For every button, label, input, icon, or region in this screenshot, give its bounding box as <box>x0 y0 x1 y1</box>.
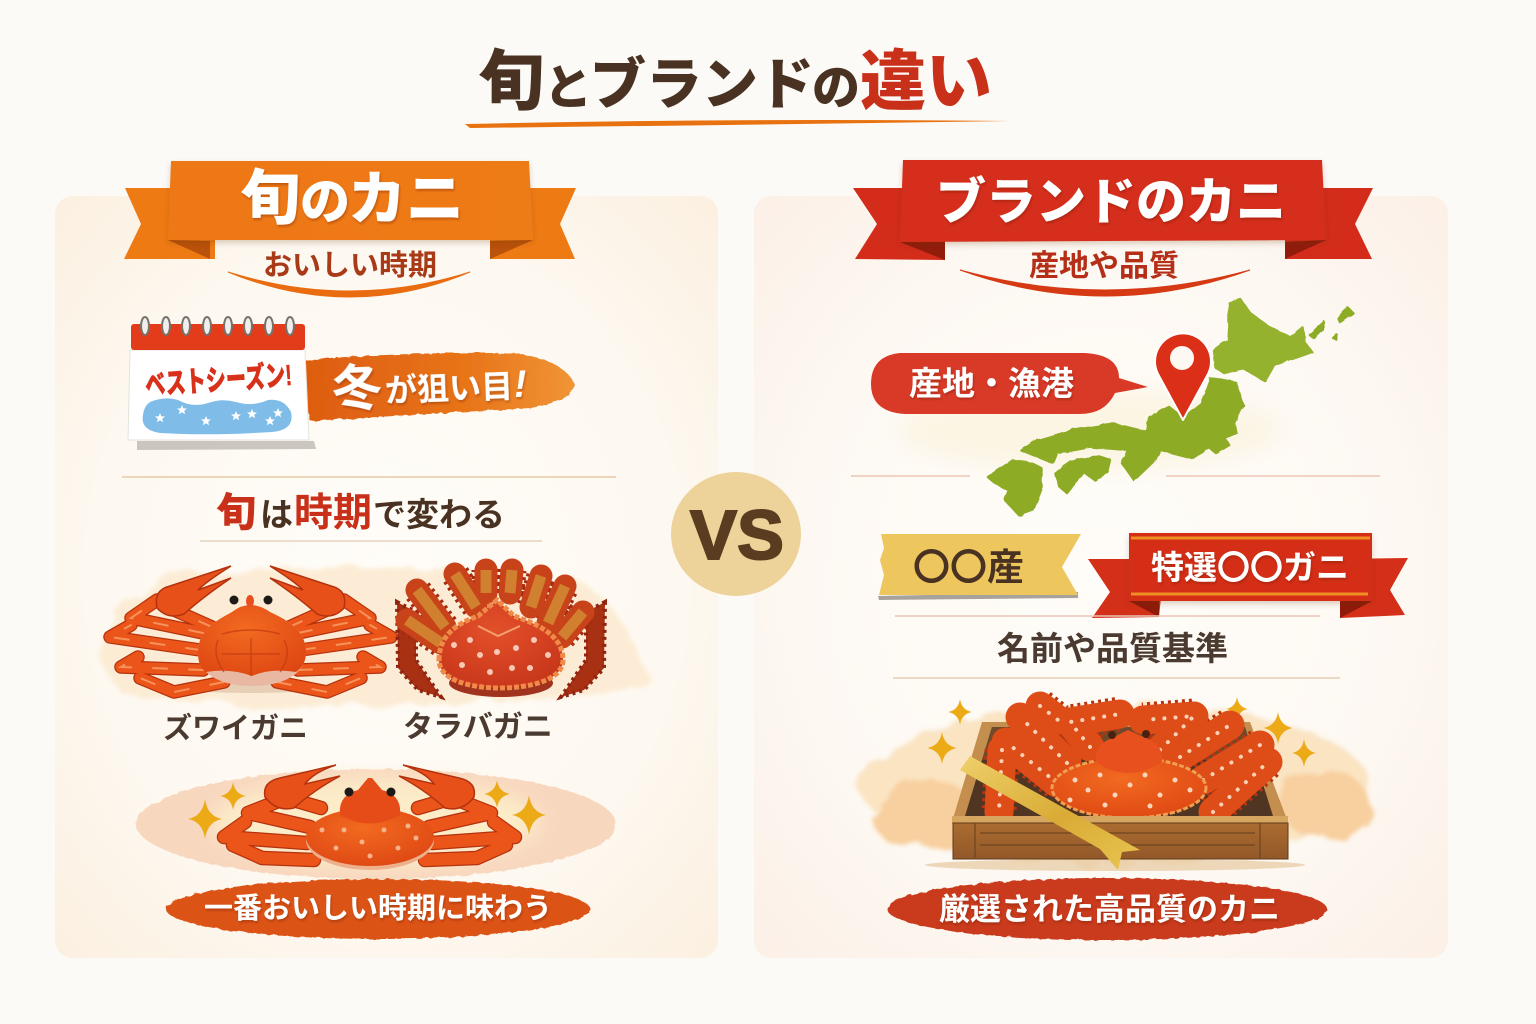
ribbon heading: 旬のカニ: の <box>300 174 350 230</box>
subtitle: 産地や品質 <box>960 250 1250 296</box>
illustration: crate with king crab <box>925 697 1316 871</box>
swoosh <box>960 270 1250 296</box>
illustration: タラバガニ <box>397 570 605 697</box>
ribbon heading: 旬のカニ: 旬 <box>240 165 300 232</box>
icon: calendar <box>128 317 316 450</box>
heading: 旬は時期で変わる: 時期 <box>294 492 372 535</box>
soft glow behind map <box>900 390 1280 470</box>
ribbon: 特選〇〇ガニ <box>1088 533 1408 618</box>
title: 旬 <box>478 44 544 118</box>
brush banner: 厳選された高品質のカニ: 厳選された高品質のカニ <box>939 892 1280 927</box>
wash behind crabs <box>100 568 650 707</box>
text: 名前や品質基準: 名前や品質基準 <box>997 630 1228 667</box>
subtitle: 産地や品質: 産地や品質 <box>1029 250 1179 283</box>
title <box>465 44 1010 128</box>
title: ブランド <box>590 53 814 116</box>
tag: 〇〇産 <box>878 534 1081 600</box>
ribbon heading: ブランドのカニ <box>853 160 1373 260</box>
brush banner: 一番おいしい時期に味わう <box>166 879 590 939</box>
label: ズワイガニ: ズワイガニ <box>163 711 308 745</box>
subtitle: おいしい時期: おいしい時期 <box>263 249 437 282</box>
ribbon heading: ブランドのカニ: ブランドのカニ <box>936 174 1286 230</box>
callout: 産地・漁港: 産地・漁港 <box>909 365 1074 402</box>
icon: map pin <box>1155 333 1211 420</box>
VS badge <box>671 472 801 596</box>
map: Japan <box>988 299 1353 515</box>
brush banner: 冬が狙い目: 冬 <box>331 360 383 417</box>
brush banner: 冬が狙い目: が狙い目 <box>384 368 514 409</box>
title: の <box>812 62 860 115</box>
icon: calendar: ベストシーズン! <box>144 358 293 402</box>
swoosh <box>228 272 470 297</box>
wash behind highlighted crab <box>136 769 616 879</box>
heading: 旬は時期で変わる: で変わる <box>373 496 505 533</box>
title: 違い <box>860 44 992 118</box>
ribbon heading: 旬のカニ: カニ <box>348 167 464 232</box>
heading: 旬は時期で変わる <box>200 491 542 541</box>
brush banner: 冬が狙い目: ! <box>513 364 527 406</box>
illustration: sparkles and crab <box>188 765 546 870</box>
brush banner: 一番おいしい時期に味わう: 一番おいしい時期に味わう <box>204 892 552 925</box>
title underline <box>465 120 1010 128</box>
heading: 旬は時期で変わる: は <box>260 496 293 533</box>
subtitle: おいしい時期 <box>228 249 470 297</box>
heading: 旬は時期で変わる: 旬 <box>216 491 256 535</box>
brush banner: 厳選された高品質のカニ <box>887 878 1327 940</box>
VS badge: VS <box>690 496 784 574</box>
ribbon heading: 旬のカニ <box>124 161 576 259</box>
illustration: ズワイガニ <box>110 566 391 693</box>
sparkles <box>927 697 1316 767</box>
label: タラバガニ: タラバガニ <box>403 711 553 744</box>
title: と <box>544 62 592 115</box>
ribbon: 特選〇〇ガニ: 特選〇〇ガニ <box>1151 549 1349 586</box>
tag: 〇〇産: 〇〇産 <box>913 547 1024 588</box>
gold ribbon <box>960 756 1140 870</box>
panel: ブランドのカニ <box>754 160 1448 958</box>
brush banner: 冬が狙い目 <box>300 353 575 421</box>
panel: 旬のカニ <box>55 161 718 958</box>
callout: 産地・漁港 <box>871 353 1148 414</box>
wash behind crate <box>860 705 1370 865</box>
